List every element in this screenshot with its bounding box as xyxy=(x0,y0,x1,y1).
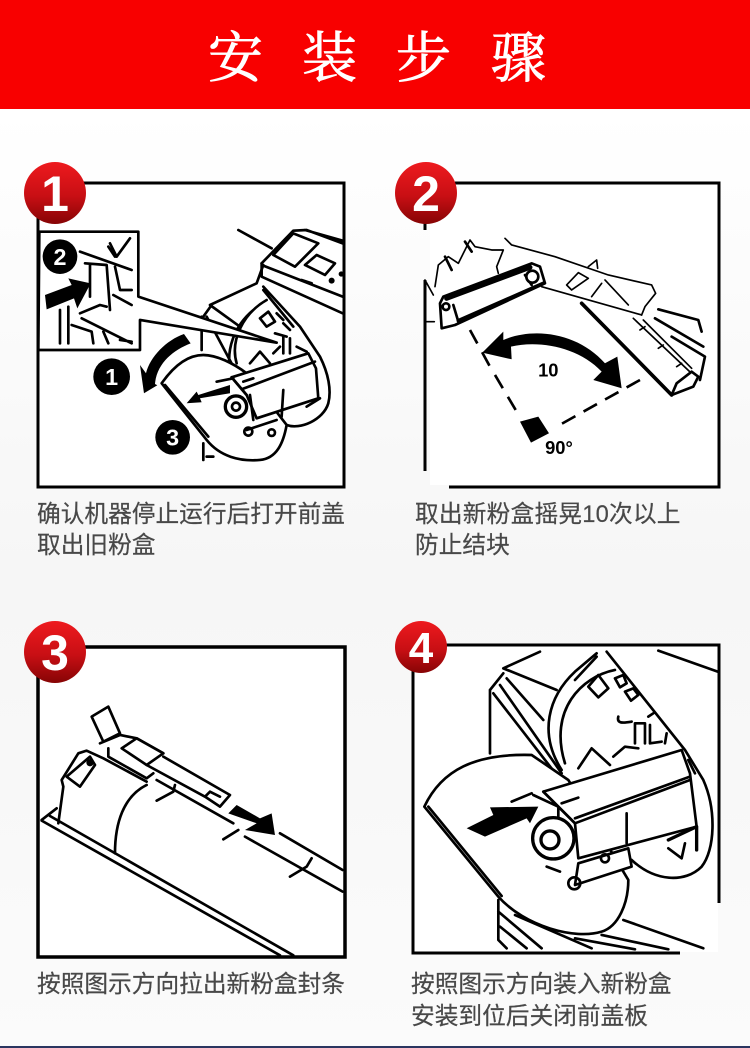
badge 4: 4 xyxy=(409,624,434,673)
caption 3: 按照图示方向拉出新粉盒封条 xyxy=(37,971,345,998)
marker 1: 1 xyxy=(105,364,118,390)
badge 4 xyxy=(395,621,447,673)
illustration: shake new cartridge xyxy=(425,238,705,458)
illustration: remove old cartridge xyxy=(38,230,344,460)
panel: step 1 xyxy=(24,162,345,559)
marker 3: 3 xyxy=(166,425,179,451)
illustration: pull seal strip xyxy=(42,707,343,955)
caption 2: 防止结块 xyxy=(415,532,510,559)
caption 4: 按照图示方向装入新粉盒 xyxy=(411,971,672,998)
label: 90 degrees: 90° xyxy=(545,437,573,458)
callout: detail inset xyxy=(38,232,277,350)
badge 3: 3 xyxy=(41,625,69,681)
illustration: install new cartridge xyxy=(424,651,718,949)
panel: step 2 xyxy=(395,162,719,559)
caption 1: 确认机器停止运行后打开前盖 xyxy=(37,501,345,528)
badge 3 xyxy=(24,621,86,683)
badge 2 xyxy=(395,162,457,224)
marker 3 xyxy=(155,420,190,455)
marker 1 xyxy=(93,358,130,395)
badge 1: 1 xyxy=(41,166,69,222)
caption 2: 取出新粉盒摇晃10次以上 xyxy=(415,501,681,528)
badge 1 xyxy=(24,162,86,224)
label: 10: 10 xyxy=(538,360,559,381)
panel: step 3 xyxy=(24,621,345,998)
badge 2: 2 xyxy=(412,166,440,222)
callout: detail inset: 2 xyxy=(54,244,67,270)
caption 4: 安装到位后关闭前盖板 xyxy=(411,1003,648,1030)
caption 1: 取出旧粉盒 xyxy=(37,532,156,559)
title banner xyxy=(0,0,750,109)
panel: step 4 xyxy=(395,621,719,1030)
title: 安装步骤 xyxy=(208,28,546,89)
